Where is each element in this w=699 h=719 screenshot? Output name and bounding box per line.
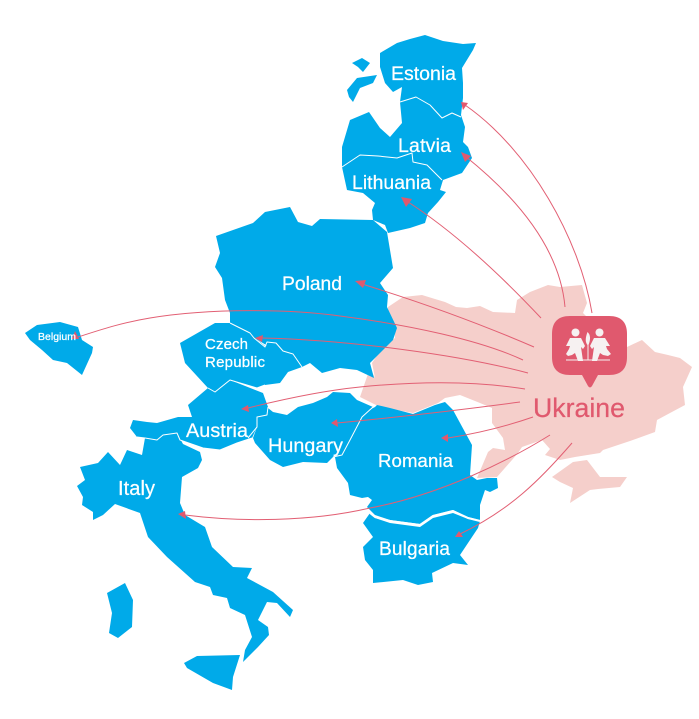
map: Romania <box>333 402 498 524</box>
map: Ukraine <box>360 285 692 503</box>
label: Latvia: Latvia <box>398 135 451 157</box>
label: Italy: Italy <box>118 478 155 500</box>
arrow: Ukraine to Latvia <box>461 152 565 307</box>
label: Ukraine: Ukraine <box>533 393 625 423</box>
label: Estonia: Estonia <box>391 63 456 85</box>
map: Hungary <box>248 392 373 467</box>
arrow: Ukraine to Belgium <box>72 311 523 360</box>
arrow: Ukraine to Lithuania <box>401 197 541 318</box>
label: Czech Republic <box>205 336 266 371</box>
map: Estonia, Latvia and Lithuania <box>342 35 476 233</box>
label: Hungary: Hungary <box>268 435 343 457</box>
label: Romania: Romania <box>378 450 454 471</box>
label: Czech Republic: Czech <box>205 336 248 353</box>
label: Poland: Poland <box>282 274 342 295</box>
label: Lithuania: Lithuania <box>352 172 431 194</box>
icon: Ukraine charity logo marker <box>552 316 627 388</box>
map: Poland <box>215 207 397 378</box>
map: Bulgaria <box>363 511 480 585</box>
map: Czech Republic <box>180 323 302 392</box>
label: Belgium: Belgium <box>38 331 76 343</box>
label: Austria: Austria <box>186 420 248 442</box>
arrow: Ukraine to Poland <box>355 280 534 347</box>
arrow: Ukraine to Romania <box>441 417 533 442</box>
arrow: Ukraine to Estonia <box>461 102 592 313</box>
label: Bulgaria: Bulgaria <box>379 539 450 560</box>
map: Austria <box>130 380 268 450</box>
map: Belgium <box>25 322 93 375</box>
arrow: Ukraine to Czech Republic <box>255 335 528 373</box>
arrow: Ukraine to Hungary <box>331 402 520 427</box>
arrow: Ukraine to Bulgaria <box>455 443 572 537</box>
label: Czech Republic: Republic <box>205 354 266 371</box>
arrow: Ukraine to Austria <box>241 383 525 412</box>
arrow: Ukraine to Italy <box>178 435 550 520</box>
map: Italy <box>77 433 293 690</box>
